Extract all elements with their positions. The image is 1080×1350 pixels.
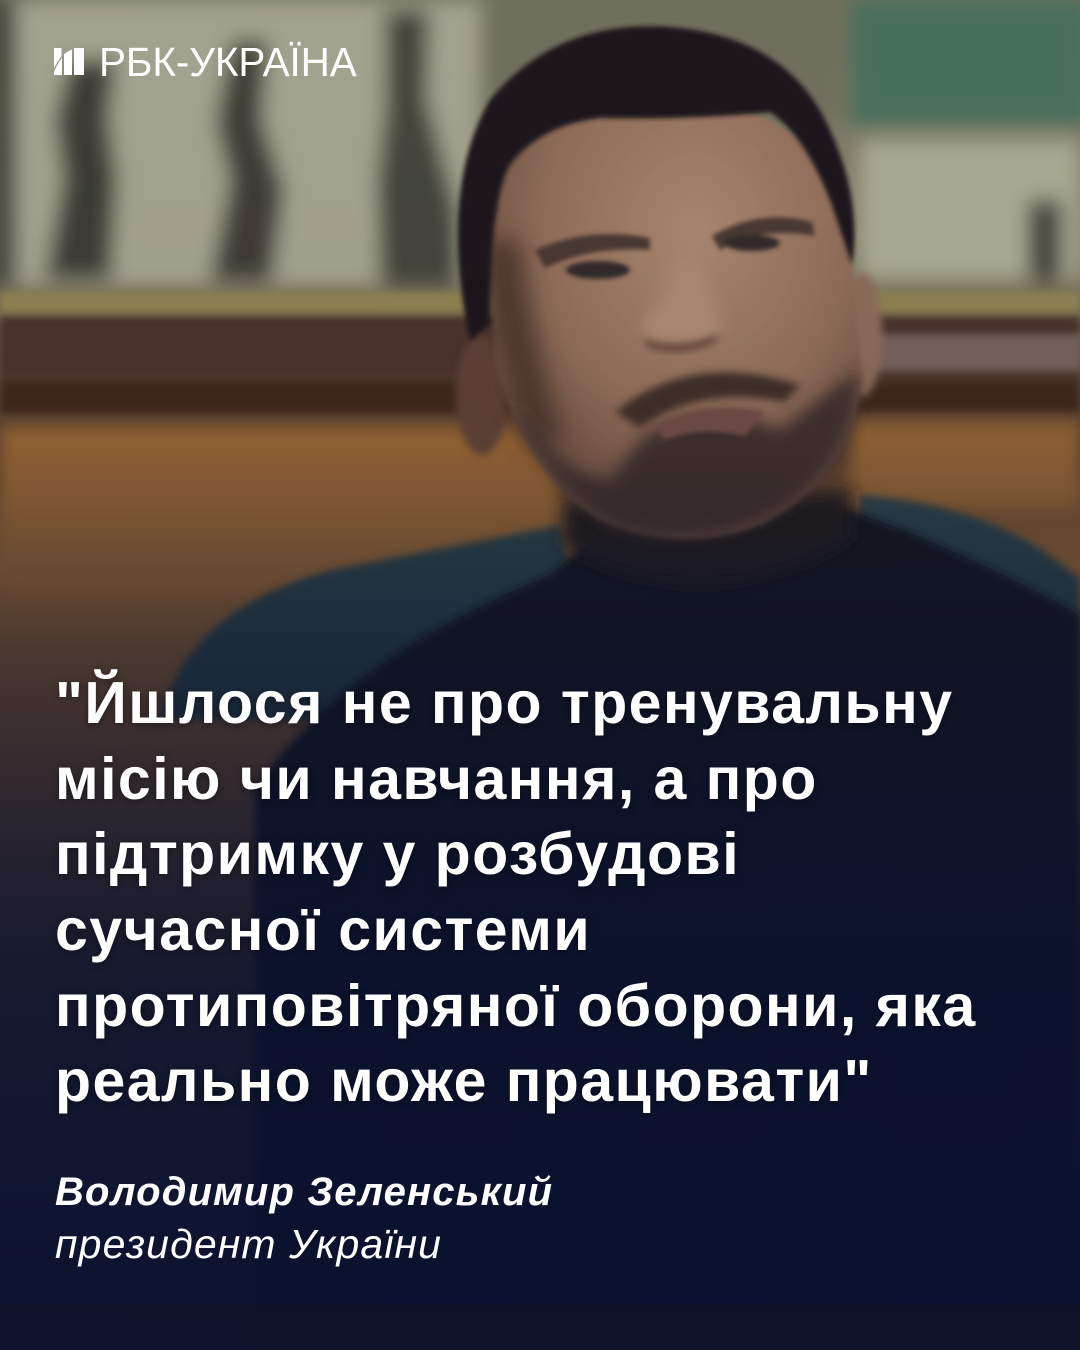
quote text: сучасної системи [55, 897, 591, 963]
icon: logo mark [54, 48, 84, 75]
logo wordmark: РБК-УКРАЇНА [99, 39, 357, 85]
nose [642, 260, 722, 352]
light wall panels [0, 0, 1080, 285]
ears [456, 335, 508, 455]
wood rail [0, 292, 1080, 414]
beard [512, 370, 858, 536]
quote text [55, 669, 977, 1114]
quote text: "Йшлося не про тренувальну [55, 670, 954, 736]
moustache [615, 372, 800, 428]
quote text: підтримку у розбудові [55, 821, 740, 887]
neck shadow [562, 490, 852, 584]
quote text: місію чи навчання, а про [55, 746, 818, 812]
chair [160, 495, 1080, 720]
lips [655, 408, 765, 440]
quote text: протиповітряної оборони, яка [55, 973, 977, 1039]
eyes and brows [535, 217, 815, 279]
logo: РБК-Україна [54, 39, 357, 85]
hair [458, 26, 854, 340]
attribution: speaker role: президент України [55, 1221, 442, 1267]
face [490, 100, 862, 539]
quote text: реально може працювати" [55, 1048, 873, 1114]
sweater [255, 510, 1080, 1350]
attribution: speaker name: Володимир Зеленський [55, 1170, 553, 1214]
left cheek shade [480, 240, 565, 450]
